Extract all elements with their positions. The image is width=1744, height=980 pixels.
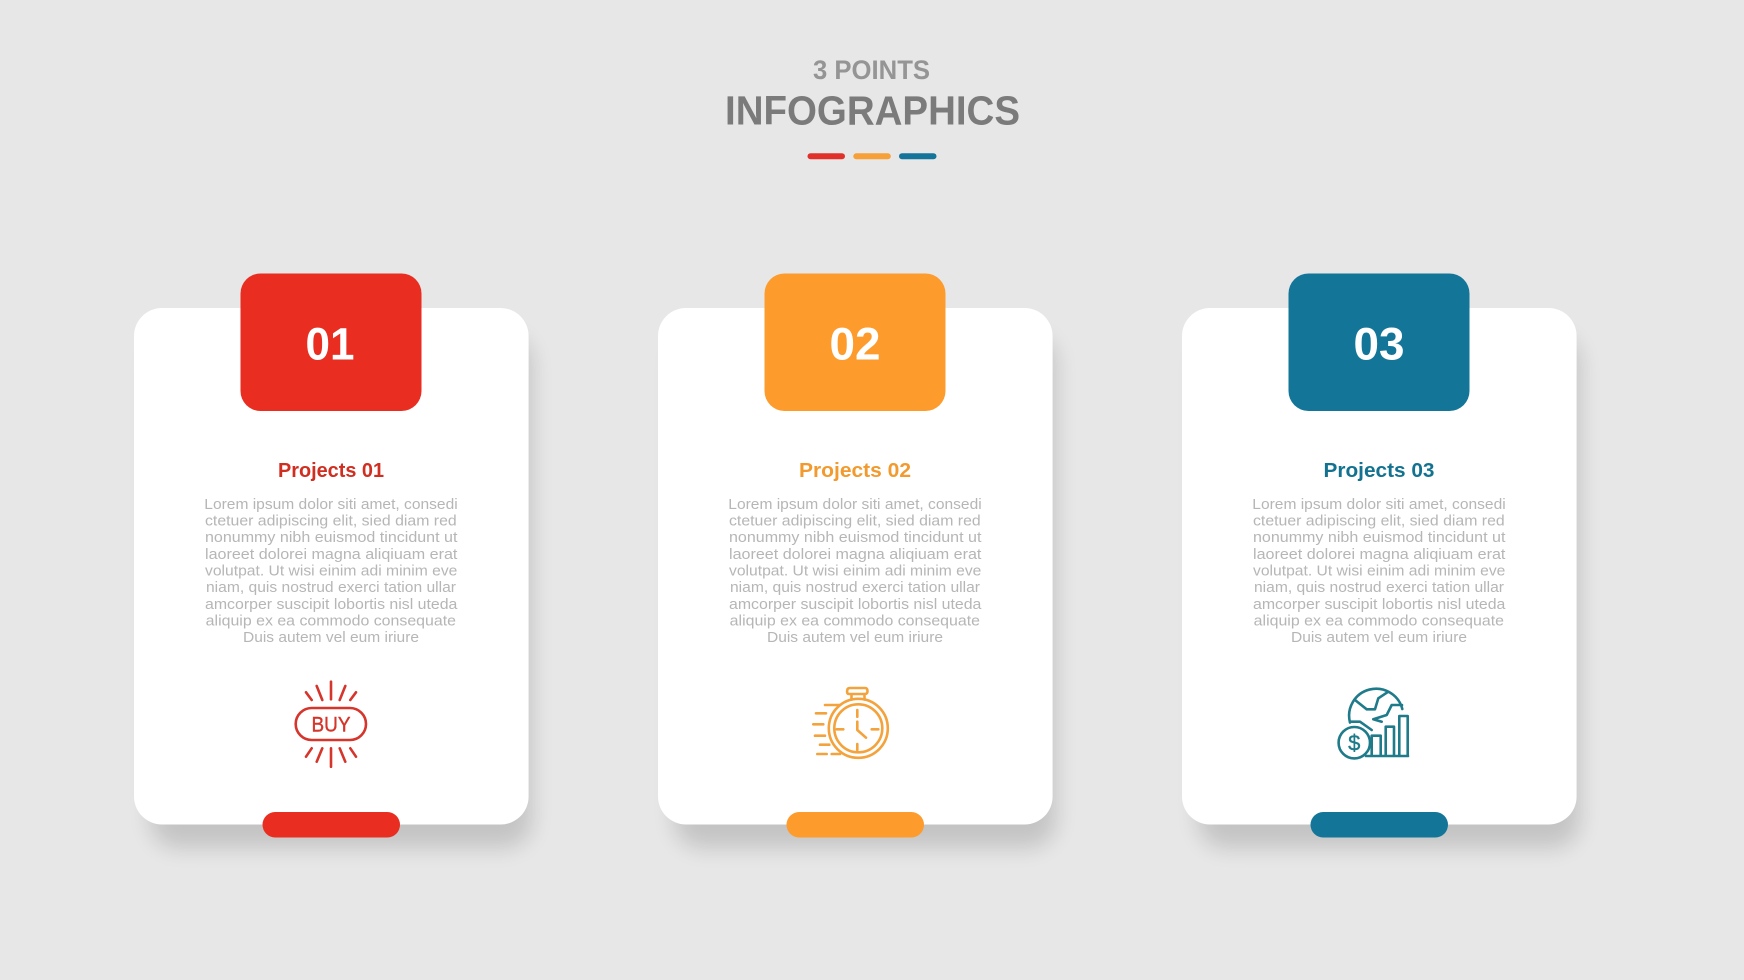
- body text: amcorper suscipit lobortis nisl uteda: [729, 596, 982, 613]
- body text: [728, 496, 982, 646]
- icon: buy button: BUY: [312, 714, 350, 737]
- number badge: [764, 274, 946, 411]
- body text: laoreet dolorei magna aliqiuam erat: [205, 546, 458, 563]
- panel: card 03: [1182, 274, 1580, 848]
- subtitle: 3 POINTS: 3 POINTS: [813, 55, 930, 85]
- title block: [725, 55, 1020, 159]
- bottom pill: [786, 812, 924, 838]
- body text: niam, quis nostrud exerci tation ullar: [730, 579, 980, 596]
- body text: nonummy nibh euismod tincidunt ut: [729, 529, 982, 546]
- body text: [1252, 496, 1506, 646]
- body text: niam, quis nostrud exerci tation ullar: [206, 579, 456, 596]
- card body: [658, 308, 1053, 824]
- accent bars: [808, 153, 936, 159]
- title: INFOGRAPHICS: INFOGRAPHICS: [725, 88, 1020, 134]
- heading: Projects 03: Projects 03: [1324, 459, 1434, 482]
- heading: Projects 01: Projects 01: [278, 459, 384, 482]
- body text: ctetuer adipiscing elit, sied diam red: [729, 512, 981, 530]
- body text: Lorem ipsum dolor siti amet, consedi: [728, 496, 982, 513]
- bottom pill: [262, 812, 400, 838]
- body text: Duis autem vel eum iriure: [243, 629, 419, 646]
- body text: amcorper suscipit lobortis nisl uteda: [1253, 596, 1506, 613]
- card body: [134, 308, 529, 824]
- body text: volutpat. Ut wisi einim adi minim eve: [1253, 562, 1505, 580]
- icon: globe, coin and bars: [1339, 689, 1408, 758]
- card shadow: [674, 335, 1056, 848]
- panel: card 01: [134, 274, 532, 848]
- body text: nonummy nibh euismod tincidunt ut: [1253, 529, 1506, 546]
- icon: stopwatch: [813, 688, 888, 758]
- icon: globe, coin and bars: $: [1348, 730, 1360, 756]
- body text: Lorem ipsum dolor siti amet, consedi: [204, 496, 458, 513]
- body text: laoreet dolorei magna aliqiuam erat: [1253, 546, 1506, 563]
- body text: niam, quis nostrud exerci tation ullar: [1254, 579, 1504, 596]
- card body: [1182, 308, 1577, 824]
- body text: volutpat. Ut wisi einim adi minim eve: [729, 562, 981, 580]
- number 01: 01: [306, 319, 354, 370]
- body text: Lorem ipsum dolor siti amet, consedi: [1252, 496, 1506, 513]
- body text: nonummy nibh euismod tincidunt ut: [205, 529, 458, 546]
- body text: Duis autem vel eum iriure: [767, 629, 943, 646]
- body text: ctetuer adipiscing elit, sied diam red: [1253, 512, 1505, 530]
- card shadow: [1198, 335, 1580, 848]
- body text: Duis autem vel eum iriure: [1291, 629, 1467, 646]
- number 03: 03: [1354, 319, 1404, 370]
- body text: aliquip ex ea commodo consequate: [730, 612, 980, 630]
- heading: Projects 02: Projects 02: [799, 459, 911, 482]
- bottom pill: [1310, 812, 1448, 838]
- number badge: [1288, 274, 1470, 411]
- number badge: [240, 274, 422, 411]
- body text: volutpat. Ut wisi einim adi minim eve: [205, 562, 457, 580]
- body text: ctetuer adipiscing elit, sied diam red: [205, 512, 457, 530]
- body text: amcorper suscipit lobortis nisl uteda: [205, 596, 458, 613]
- body text: aliquip ex ea commodo consequate: [206, 612, 456, 630]
- number 02: 02: [830, 319, 880, 370]
- icon: buy button: [296, 682, 366, 767]
- panel: card 02: [658, 274, 1056, 848]
- body text: [204, 496, 458, 646]
- body text: aliquip ex ea commodo consequate: [1254, 612, 1504, 630]
- card shadow: [150, 335, 532, 848]
- body text: laoreet dolorei magna aliqiuam erat: [729, 546, 982, 563]
